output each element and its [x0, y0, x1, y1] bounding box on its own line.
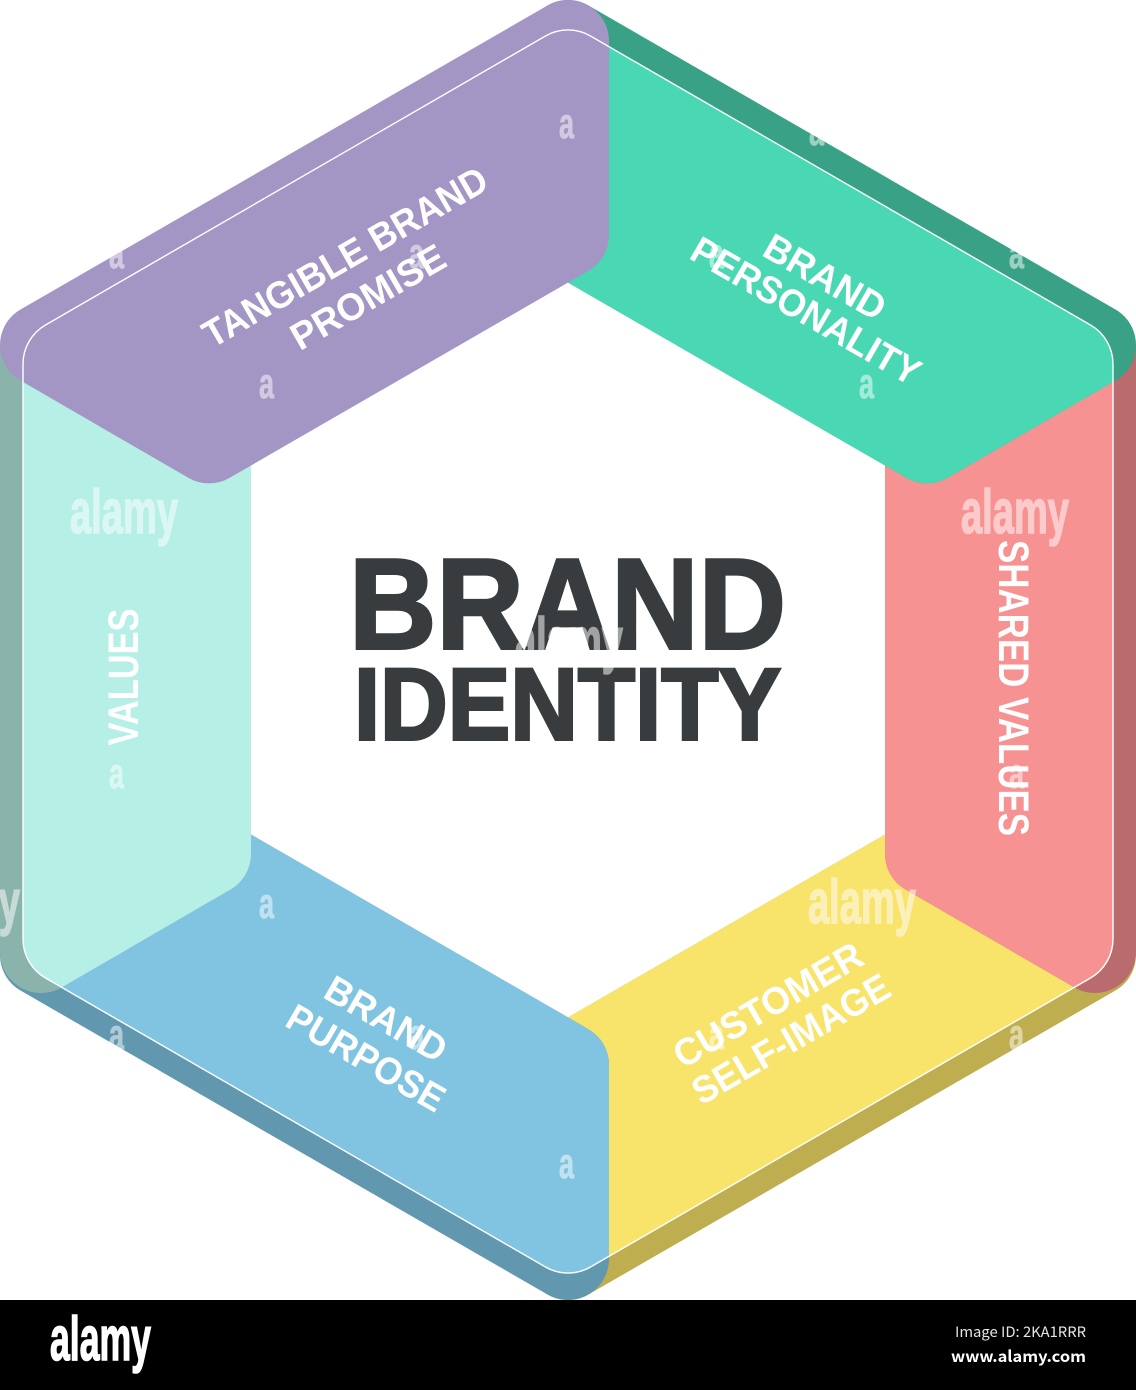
watermarks: a [1009, 230, 1025, 278]
footer logo: alamy [50, 1305, 151, 1374]
watermarks: alamy [961, 478, 1069, 547]
website: www.alamy.com [951, 1345, 1086, 1367]
watermarks [0, 100, 1069, 1188]
label: brand personality: PERSONALITY [683, 229, 928, 395]
label: values: VALUES [100, 608, 148, 746]
segment: brand personality (green) [527, 0, 1136, 483]
watermarks: alamy [515, 606, 623, 675]
segment: values (mint) [0, 345, 251, 993]
watermarks: a [709, 230, 725, 278]
segment: brand purpose (blue) [0, 817, 609, 1300]
watermarks: a [259, 880, 275, 928]
watermarks: a [259, 360, 275, 408]
segment: tangible brand promise (purple) [0, 0, 609, 483]
title: brand identity: BRAND [349, 532, 786, 676]
watermarks: alamy [70, 478, 178, 547]
watermarks: a [109, 1011, 125, 1059]
title: brand identity: IDENTITY [354, 648, 781, 762]
watermarks: a [859, 360, 875, 408]
watermarks: a [409, 1011, 425, 1059]
label: shared values: SHARED VALUES [989, 540, 1037, 836]
label: brand purpose: BRAND [317, 968, 454, 1072]
segment: customer self-image (yellow) [527, 817, 1136, 1300]
footer bar [0, 1300, 1136, 1390]
label: customer self-image: SELF-IMAGE [685, 966, 898, 1114]
watermarks: a [709, 1011, 725, 1059]
watermarks: a [409, 230, 425, 278]
watermarks: a [1009, 750, 1025, 798]
title: brand identity [349, 532, 786, 762]
label: brand purpose: PURPOSE [279, 997, 452, 1121]
watermarks: a [809, 107, 825, 155]
watermarks: a [109, 750, 125, 798]
label: tangible brand promise: TANGIBLE BRAND [196, 159, 495, 357]
label: customer self-image: CUSTOMER [666, 935, 871, 1077]
watermarks: a [1009, 1011, 1025, 1059]
label: brand personality: BRAND [756, 226, 893, 330]
image id: Image ID: 2KA1RRR [955, 1321, 1086, 1342]
watermarks: a [559, 1140, 575, 1188]
segment: shared values (pink) [885, 345, 1136, 993]
watermarks: a [109, 230, 125, 278]
label: tangible brand promise: PROMISE [284, 237, 453, 359]
watermarks: alamy [808, 868, 916, 937]
watermarks: a [559, 100, 575, 148]
